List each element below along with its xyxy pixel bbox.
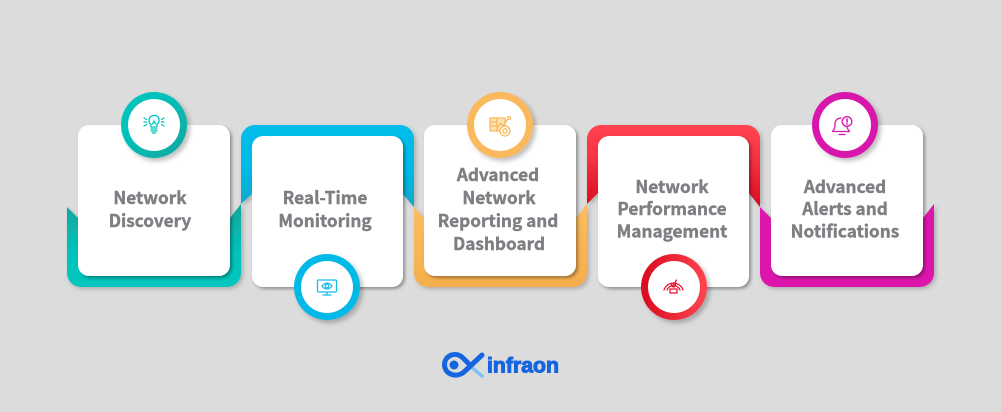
blue band behind card bbox=[241, 125, 414, 207]
heading: Advanced Network Reporting and Dashboard: Dashboard bbox=[453, 230, 545, 255]
badge ring bbox=[812, 92, 878, 158]
panel: Real-Time Monitoring bbox=[241, 125, 414, 320]
white card bbox=[771, 125, 923, 276]
heading: Advanced Network Reporting and Dashboard: Advanced bbox=[456, 161, 539, 186]
badge ring bbox=[467, 92, 533, 158]
panel: Advanced Network Reporting and Dashboard bbox=[414, 92, 587, 287]
icon: alert bell bbox=[832, 117, 852, 134]
icon: report dashboard bbox=[490, 116, 510, 136]
white card bbox=[424, 125, 576, 276]
heading: Network Performance Management: Management bbox=[617, 218, 727, 242]
magenta band behind card bbox=[760, 204, 934, 287]
white card bbox=[598, 136, 749, 287]
logo: infraon bbox=[444, 354, 559, 378]
heading: Network Discovery: Network bbox=[113, 184, 187, 209]
heading: Real-Time Monitoring: Monitoring bbox=[278, 207, 372, 232]
heading: Advanced Network Reporting and Dashboard: Network bbox=[462, 184, 536, 209]
yellow band behind card bbox=[414, 204, 587, 287]
white card bbox=[252, 136, 403, 287]
icon: performance gauge bbox=[664, 280, 683, 293]
heading: Advanced Alerts and Notifications: Advanced bbox=[803, 173, 886, 198]
logo mark: eye loop bbox=[444, 354, 482, 376]
icon: monitor with eye bbox=[318, 280, 336, 295]
heading: Network Performance Management: Network bbox=[635, 173, 709, 198]
heading: Network Discovery: Discovery bbox=[109, 207, 191, 232]
panel: Network Performance Management bbox=[587, 125, 760, 320]
panel: Advanced Alerts and Notifications bbox=[760, 92, 934, 287]
heading: Advanced Alerts and Notifications: Alerts and bbox=[801, 195, 888, 220]
badge ring bbox=[294, 254, 360, 320]
heading: Advanced Alerts and Notifications: Notifications bbox=[791, 218, 899, 242]
heading: Network Performance Management: Performance bbox=[617, 195, 727, 220]
badge ring bbox=[121, 92, 187, 158]
icon: light bulb bbox=[144, 115, 164, 133]
heading: Real-Time Monitoring: Real-Time bbox=[283, 184, 367, 209]
panel: Network Discovery bbox=[67, 92, 241, 287]
teal band behind card bbox=[67, 204, 241, 287]
badge ring bbox=[641, 254, 707, 320]
white card bbox=[78, 125, 230, 276]
heading: Advanced Network Reporting and Dashboard: Reporting and bbox=[438, 207, 558, 232]
red band behind card bbox=[587, 125, 760, 207]
logo wordmark: infraon bbox=[487, 354, 559, 378]
